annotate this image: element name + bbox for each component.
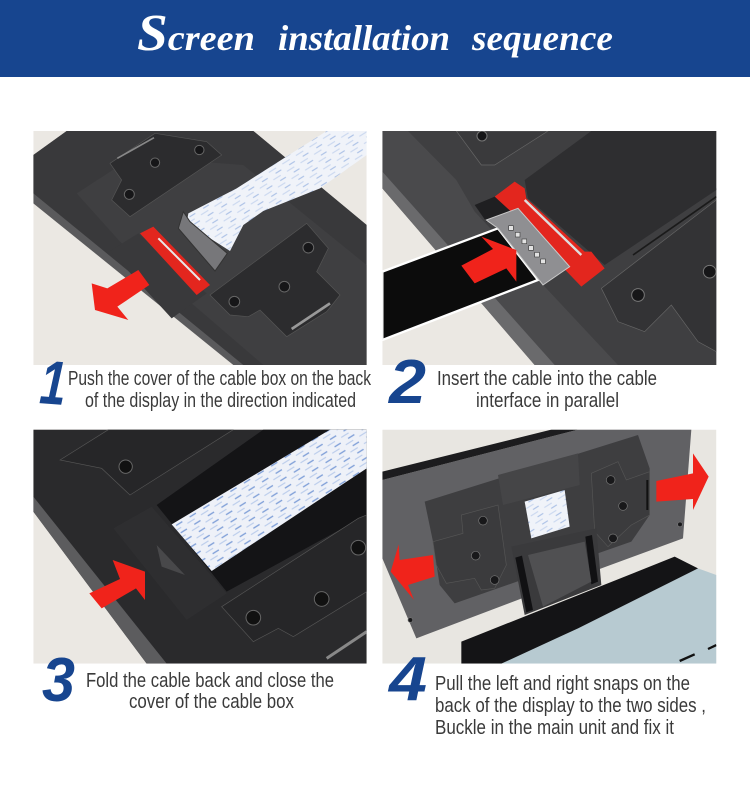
caption: step 2: 2 [388, 348, 426, 417]
stand [511, 528, 601, 615]
caption: step 3: Fold the cable back and close the [86, 670, 334, 692]
title [137, 5, 613, 62]
arrow: push left [92, 270, 149, 320]
cover [113, 507, 227, 620]
caption: step 3: 3 [42, 646, 75, 715]
caption: step 1: of the display in the direction indicated [85, 390, 356, 412]
top plate [456, 131, 548, 165]
title: sequence [471, 18, 613, 58]
caption: step 1 [38, 348, 372, 419]
title: installation [278, 18, 450, 58]
top plate [110, 133, 222, 217]
panel: step 3 photo [33, 430, 367, 664]
arrow: close [89, 560, 145, 608]
title: Screen [137, 5, 255, 62]
red slot [140, 227, 210, 295]
caption: step 2: Insert the cable into the cable [437, 368, 657, 390]
ribbon cable [187, 131, 367, 251]
header banner [0, 0, 750, 77]
base unit [491, 568, 716, 664]
lower plate [222, 515, 367, 642]
top plate [60, 430, 233, 495]
screws [119, 460, 366, 625]
caption: step 4: 4 [387, 645, 427, 714]
recess [157, 430, 367, 592]
black cable [382, 228, 538, 340]
arrow: insert [461, 237, 516, 283]
caption: step 4: Buckle in the main unit and fix it [435, 717, 674, 739]
left bracket [433, 505, 506, 590]
arrow: pull left [391, 544, 435, 600]
silver connector [486, 208, 570, 285]
caption: step 1: 1 [38, 348, 68, 419]
screws [408, 476, 682, 622]
slot [475, 197, 513, 222]
caption: step 2: interface in parallel [476, 390, 619, 412]
panel: step 1 photo [33, 131, 367, 365]
lower plate [210, 223, 340, 337]
caption: step 4 [387, 645, 706, 739]
cover [128, 271, 180, 318]
caption: step 2 [388, 348, 657, 417]
ribbon cable [172, 430, 367, 571]
arrow: pull right [656, 453, 709, 510]
screws [477, 131, 716, 301]
panel: step 2 photo [382, 131, 716, 365]
back plate [425, 435, 650, 603]
caption: step 4: Pull the left and right snaps on the [435, 673, 690, 695]
caption: step 4: back of the display to the two sides , [435, 695, 706, 717]
connector [178, 212, 227, 271]
panel: step 4 photo [382, 430, 716, 664]
ribbon cable [525, 490, 570, 538]
caption: step 3: cover of the cable box [129, 691, 294, 713]
red board [495, 182, 605, 287]
right bracket [591, 462, 650, 547]
caption: step 3 [42, 646, 334, 715]
right plate [601, 200, 716, 352]
screen recess [525, 131, 716, 265]
screws [124, 145, 314, 307]
caption: step 1: Push the cover of the cable box on the back [68, 368, 372, 390]
